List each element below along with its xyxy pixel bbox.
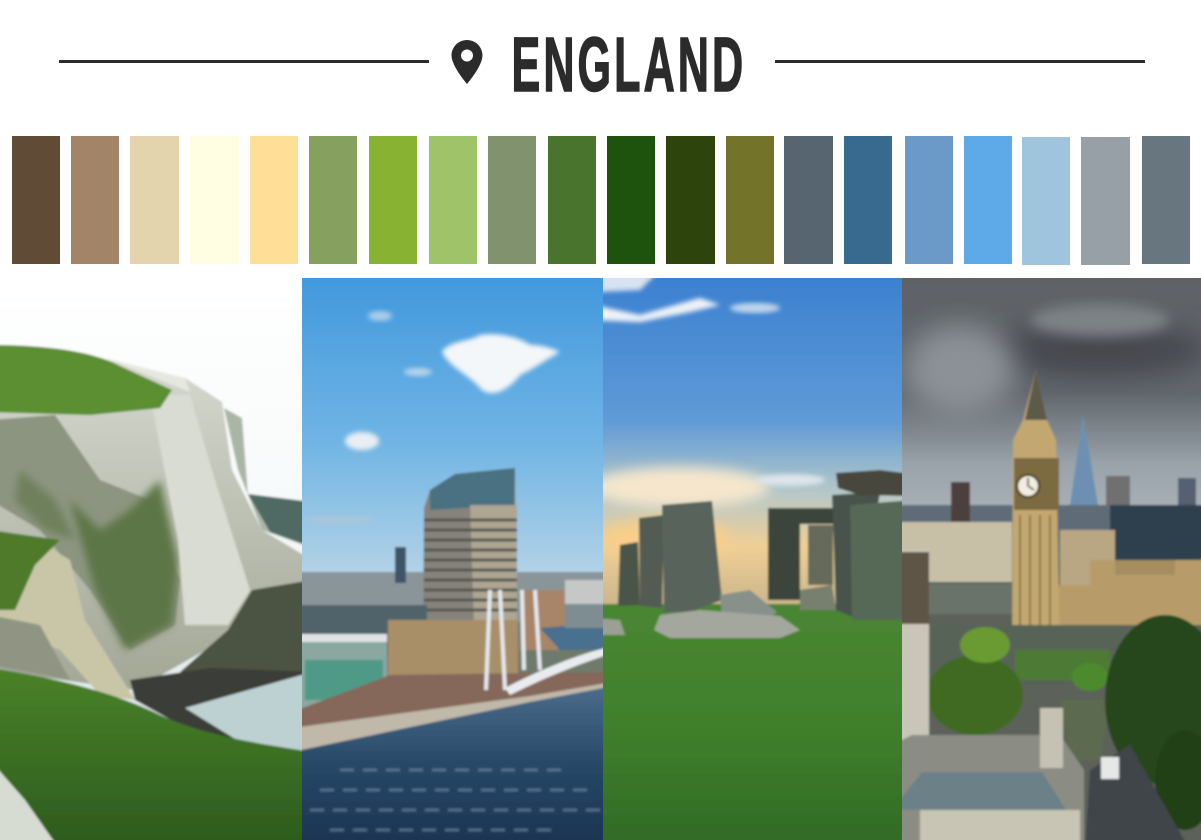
parliament: [1058, 558, 1201, 627]
skyline: [902, 504, 1112, 560]
foreground stone building: [902, 550, 931, 742]
cliff face: [0, 358, 312, 690]
low buildings: [292, 605, 427, 655]
photo: Salford Quays tower and waterfront: [292, 268, 613, 840]
foreground grass slope: [0, 668, 312, 840]
water: [292, 686, 613, 840]
photo: white chalk cliffs: [0, 344, 302, 840]
footbridge: [486, 590, 540, 690]
beach and sea: [129, 668, 302, 740]
cloud: [442, 334, 560, 393]
skyline: [292, 572, 613, 622]
stones: [618, 542, 640, 606]
river-side buildings: [892, 522, 1012, 582]
title: ENGLAND with location pin and rules: ENGLAND: [512, 23, 746, 108]
foreground rock outcrop: [0, 535, 135, 700]
grass: [593, 604, 912, 840]
quayside: [302, 672, 603, 728]
clouds: [593, 298, 720, 322]
distant headland and sea: [223, 408, 302, 546]
clock tower: [1012, 370, 1060, 655]
trees and lawn: [1010, 624, 1201, 657]
tower: [422, 475, 517, 621]
title: ENGLAND with location pin and rules: [59, 23, 1145, 108]
colour palette swatches: [12, 136, 1190, 265]
top grass: [0, 345, 172, 415]
street: [1085, 745, 1190, 840]
photo: Stonehenge: [590, 268, 912, 840]
photo: Big Ben and Westminster: [892, 268, 1201, 840]
storm clouds: [990, 322, 1201, 378]
fallen stones: [720, 590, 777, 618]
icon: location pin: [452, 40, 482, 84]
